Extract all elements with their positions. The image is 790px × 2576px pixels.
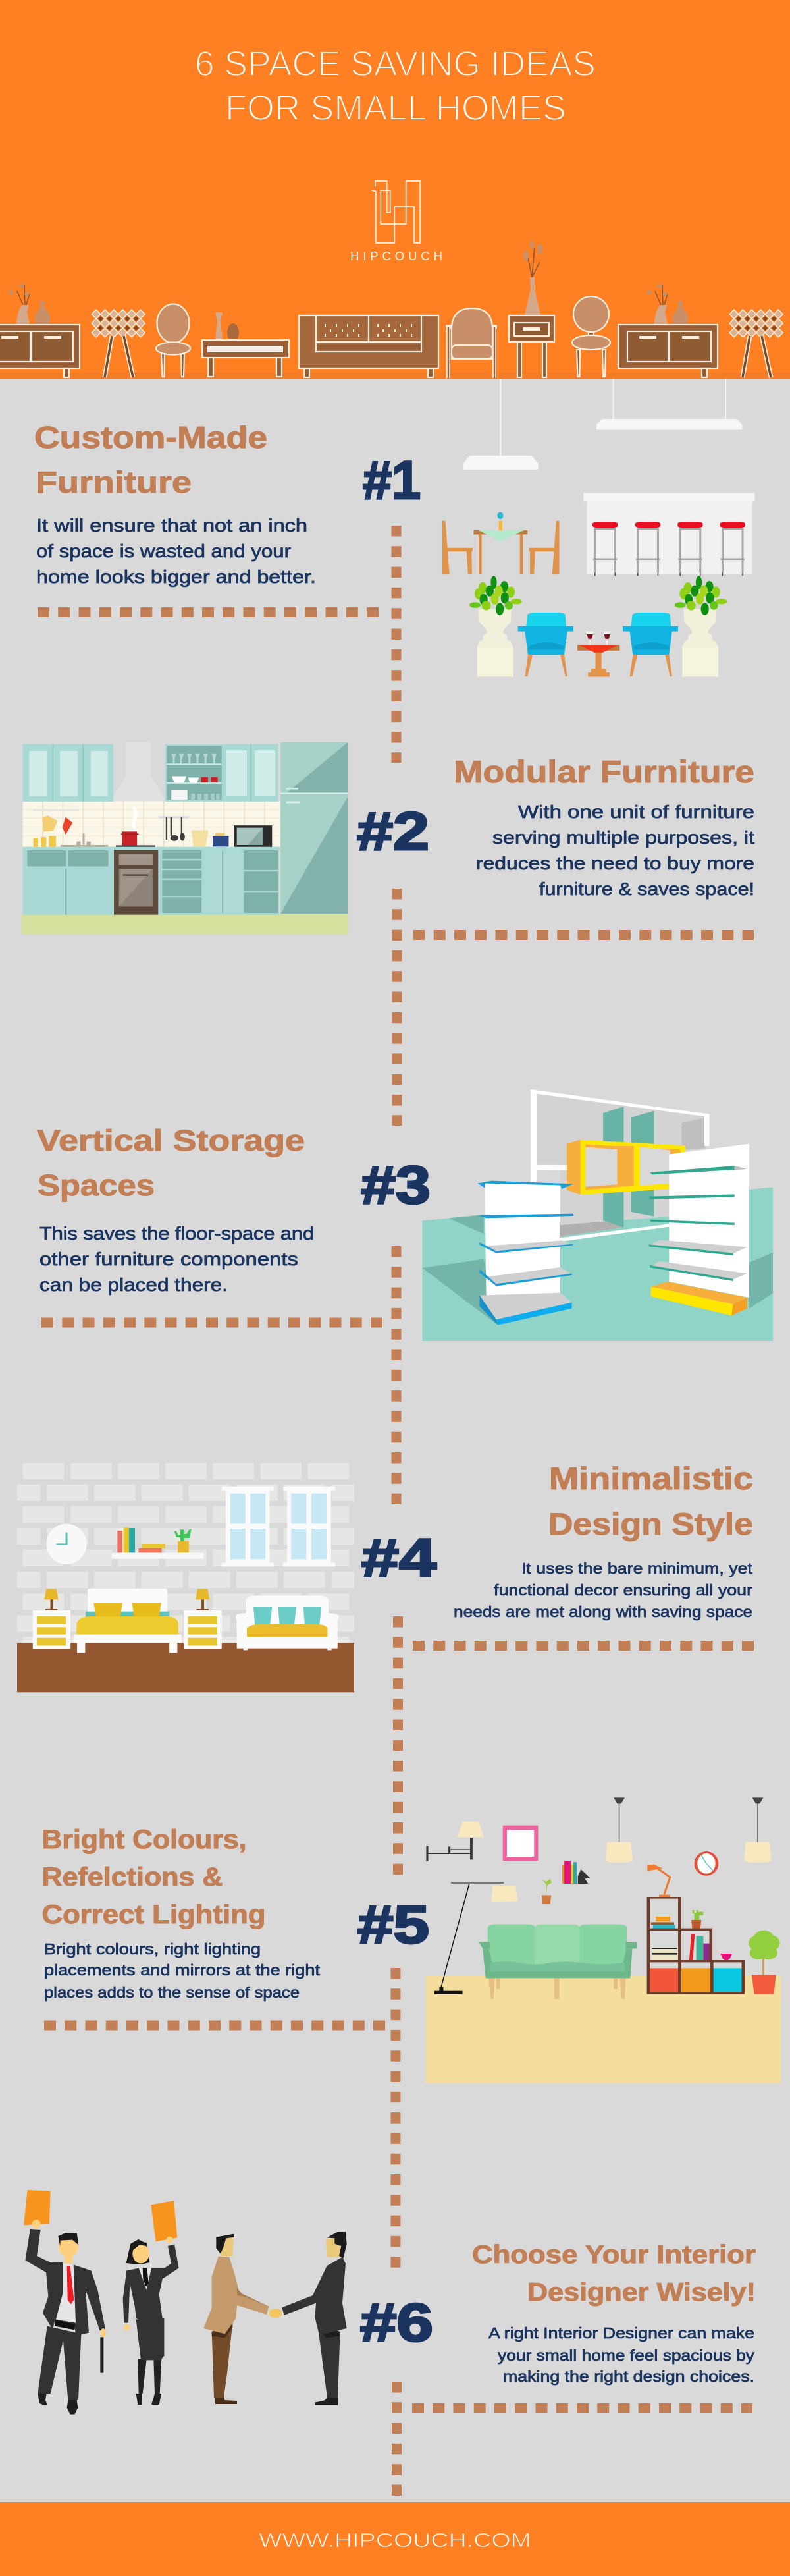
wall window frame (531, 1089, 710, 1242)
loveseat (236, 1595, 339, 1650)
floor (22, 914, 348, 935)
dashed connector 3 (41, 1246, 396, 1504)
body text 1: It will ensure that not an inch (36, 515, 307, 535)
heading 1 (34, 420, 267, 499)
counter (22, 847, 280, 850)
body text 4: needs are met along with saving space (454, 1603, 752, 1620)
dashed connector 4 (398, 1616, 754, 1875)
body text 2 (476, 802, 754, 899)
dashed connector 1 (38, 526, 396, 763)
body text 5: Bright colours, right lighting (44, 1940, 261, 1958)
section 1: custom-made furniture (34, 379, 754, 763)
heading 4 (548, 1461, 753, 1541)
nightstands with lamps (33, 1589, 222, 1649)
body text 2: serving multiple purposes, it (492, 827, 754, 848)
brick wall (17, 1463, 354, 1653)
header band (0, 0, 790, 379)
oven (114, 850, 158, 915)
heading 3 (37, 1124, 305, 1202)
body text 1: home looks bigger and better. (36, 566, 316, 587)
body text 6: making the right design choices. (503, 2368, 754, 2385)
body text 2: furniture & saves space! (539, 879, 754, 899)
body text 3: can be placed there. (40, 1274, 228, 1295)
body text 6 (488, 2324, 755, 2385)
heading 6: Choose Your Interior (472, 2241, 756, 2269)
heading 4: Design Style (548, 1506, 753, 1541)
logo: Hipcouch (350, 181, 442, 263)
furniture row illustration (0, 241, 790, 379)
sofa (299, 315, 438, 377)
yellow wall shelf (567, 1140, 685, 1195)
number 5: #5 (357, 1895, 429, 1955)
cube bookshelf (647, 1897, 745, 1994)
heading 4: Minimalistic (549, 1461, 753, 1496)
floor (422, 1187, 773, 1341)
range hood (113, 742, 164, 801)
sideboard right (618, 283, 718, 377)
man in tan jacket (203, 2234, 269, 2404)
armchair (446, 308, 497, 378)
dashed connector 6 (396, 2382, 752, 2497)
green sofa (479, 1925, 637, 1999)
body text 1 (36, 515, 316, 587)
title (195, 44, 596, 128)
body text 2: With one unit of furniture (518, 802, 754, 822)
woman with folder (123, 2201, 179, 2405)
lower cabinets (22, 850, 279, 915)
small potted plant (542, 1878, 552, 1904)
sideboard left (0, 283, 80, 377)
bar counter with stools (583, 493, 754, 576)
planters (469, 576, 727, 676)
floor lamp (434, 1882, 518, 1994)
body text 3: This saves the floor-space and (40, 1223, 314, 1244)
bed (74, 1589, 182, 1653)
section 3: vertical storage (37, 1089, 773, 1504)
backsplash (22, 801, 280, 847)
pendant lights (606, 1797, 772, 1863)
body text 5 (44, 1940, 321, 2001)
potted tree (749, 1931, 780, 1994)
illustration: lounge with bar and dining (442, 379, 754, 676)
chair left (156, 304, 190, 377)
logo: Hipcouch: HIPCOUCH (350, 249, 442, 263)
heading 5 (42, 1825, 266, 1929)
body text 5: places adds to the sense of space (44, 1984, 300, 2001)
body text 4 (454, 1560, 753, 1620)
upper cabinets left (22, 744, 113, 802)
right shelving unit (649, 1144, 749, 1315)
heading 5: Correct Lighting (42, 1900, 266, 1929)
title: FOR SMALL HOMES (225, 88, 566, 128)
website: WWW.HIPCOUCH.COM (259, 2529, 531, 2552)
illustration: business people shaking hands (24, 2190, 347, 2415)
hanging utensils and worktop items (33, 807, 272, 847)
illustration: minimalist bedroom (17, 1463, 354, 1692)
illustration: shelving units in teal room (422, 1089, 773, 1341)
body text 6: A right Interior Designer can make (488, 2324, 754, 2342)
number 2: #2 (357, 802, 429, 862)
body text 3: other furniture components (40, 1249, 298, 1269)
body text 4: functional decor ensuring all your (494, 1581, 752, 1599)
windows (222, 1487, 335, 1566)
desk lamp (647, 1865, 670, 1897)
dashed connector 2 (397, 889, 754, 1126)
upper shelves (165, 744, 278, 802)
coffee table (202, 312, 289, 377)
heading 3: Spaces (38, 1168, 155, 1202)
refrigerator (280, 742, 348, 914)
body text 2: reduces the need to buy more (476, 853, 754, 873)
number 6: #6 (360, 2293, 433, 2353)
heading 5: Bright Colours, (42, 1825, 246, 1854)
section 2: modular furniture (22, 742, 754, 1126)
heading 6: Designer Wisely! (527, 2278, 756, 2307)
wall lamp (426, 1822, 484, 1861)
heading 3: Vertical Storage (37, 1124, 305, 1157)
man in dark suit (282, 2232, 347, 2405)
dining set (442, 512, 559, 574)
side table with vase (509, 241, 554, 377)
number 3: #3 (361, 1155, 431, 1215)
left shelving unit (478, 1181, 573, 1325)
pendant lamps (463, 379, 742, 470)
pink mirror frame (503, 1826, 538, 1861)
floor (17, 1643, 354, 1692)
rug (426, 1976, 781, 2083)
body text 3 (40, 1223, 314, 1295)
illustration: bright living room (426, 1797, 781, 2083)
body text 4: It uses the bare minimum, yet (521, 1560, 753, 1577)
body text 1: of space is wasted and your (36, 541, 291, 561)
books and knight bookend (562, 1861, 590, 1884)
illustration: kitchen (22, 742, 348, 935)
side table with wine glasses (577, 632, 619, 676)
number 4: #4 (361, 1528, 436, 1588)
title: 6 SPACE SAVING IDEAS (195, 44, 596, 84)
blue armchairs (518, 613, 678, 676)
man with folder (24, 2190, 106, 2415)
heading 6 (472, 2241, 756, 2307)
heading 2: Modular Furniture (454, 754, 754, 789)
wall clock (695, 1851, 718, 1876)
heading 5: Refelctions & (42, 1863, 223, 1892)
body text 6: your small home feel spacious by (498, 2347, 755, 2364)
section 5: bright colours, reflections and lighting (42, 1797, 781, 2268)
heading 1: Custom-Made (34, 420, 267, 454)
dashed connector 5 (44, 1968, 396, 2268)
wall shelf with books and plant (112, 1527, 203, 1559)
lamp left (92, 310, 145, 377)
clasped hands (269, 2309, 282, 2318)
number 1: #1 (363, 451, 421, 510)
heading 1: Furniture (36, 465, 192, 499)
section 6: choose your interior designer (24, 2190, 756, 2497)
footer band (0, 2502, 790, 2576)
body text 5: placements and mirrors at the right (44, 1961, 321, 1979)
round-back chair (572, 296, 610, 377)
wall clock (46, 1524, 87, 1564)
lamp right (729, 310, 783, 377)
floor shadows (422, 1198, 773, 1324)
section 4: minimalistic design style (17, 1461, 754, 1875)
